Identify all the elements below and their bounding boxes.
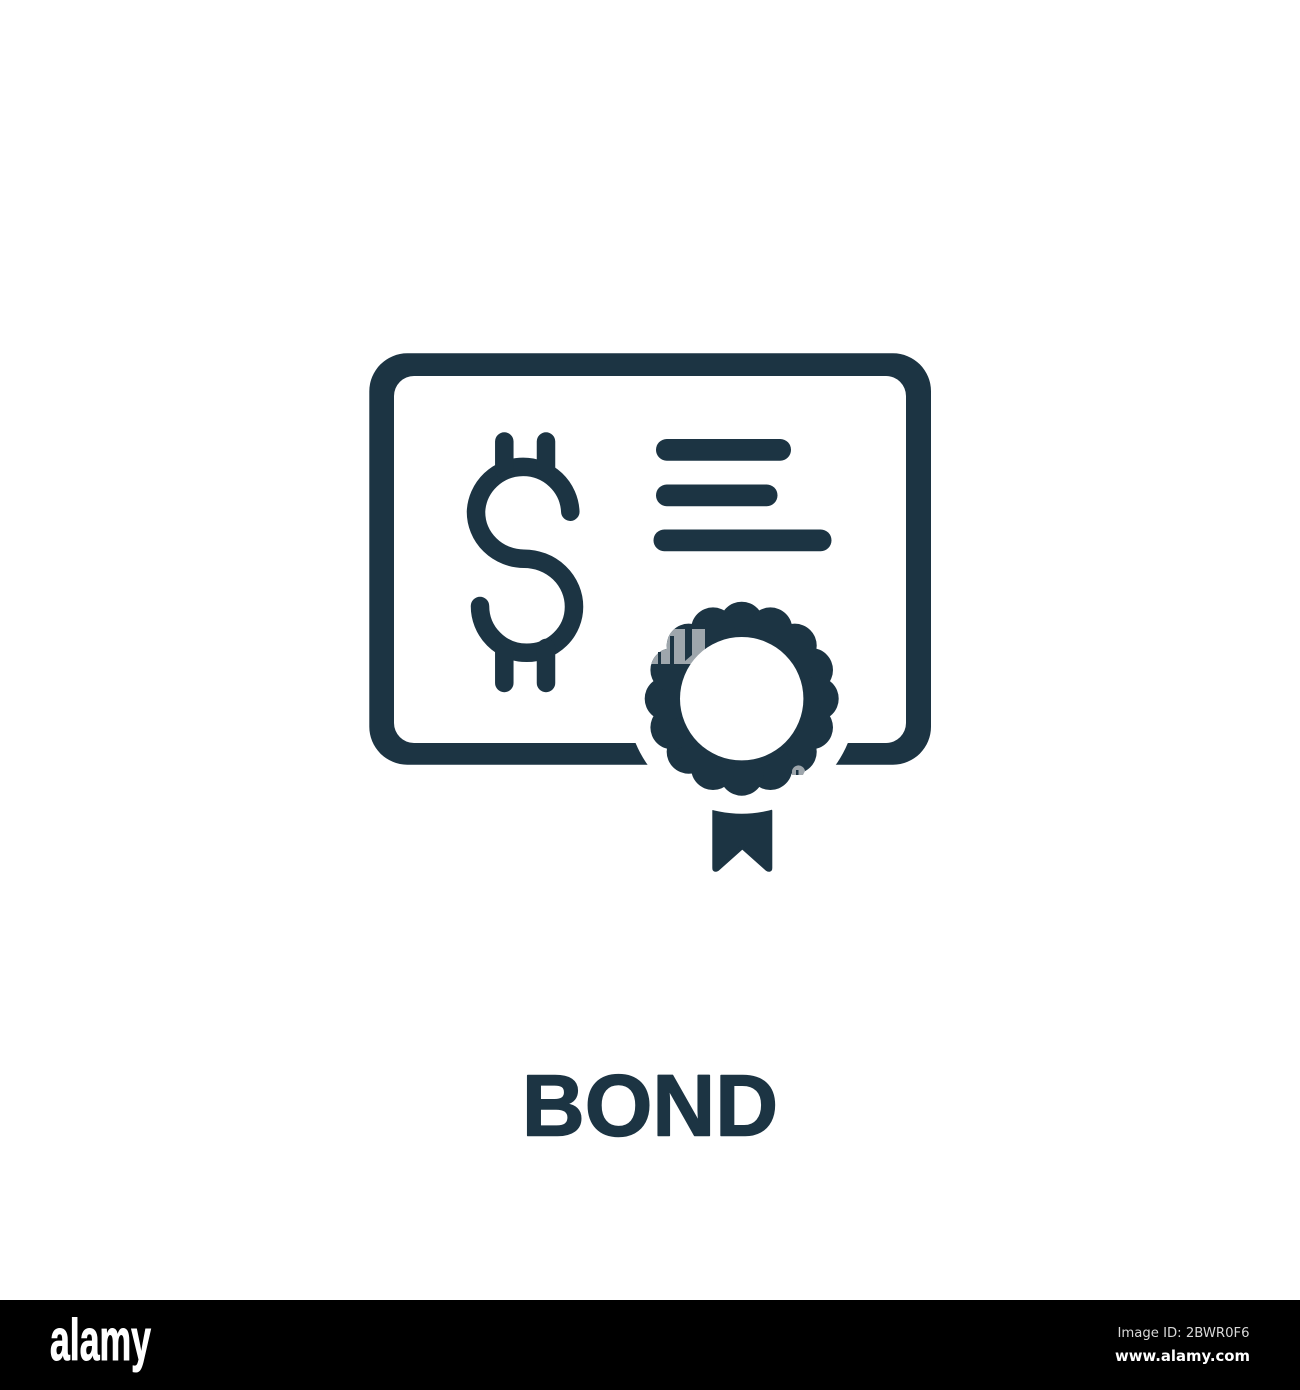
seal halo [627,584,857,814]
image id: Image ID: 2BWR0F6 [1118,1325,1250,1341]
icon: rosette seal [644,601,840,797]
title: BOND: BOND [522,1057,778,1154]
text lines [654,439,832,551]
icon: dollar sign [476,442,574,683]
footer bar [0,1300,1300,1390]
website url: www.alamy.com [1115,1347,1250,1365]
logo: alamy: alamy [50,1308,151,1373]
certificate frame [369,353,931,765]
icon: bond certificate [369,353,931,870]
icon: ribbon tails [714,811,770,870]
infographic canvas [0,353,1300,1390]
